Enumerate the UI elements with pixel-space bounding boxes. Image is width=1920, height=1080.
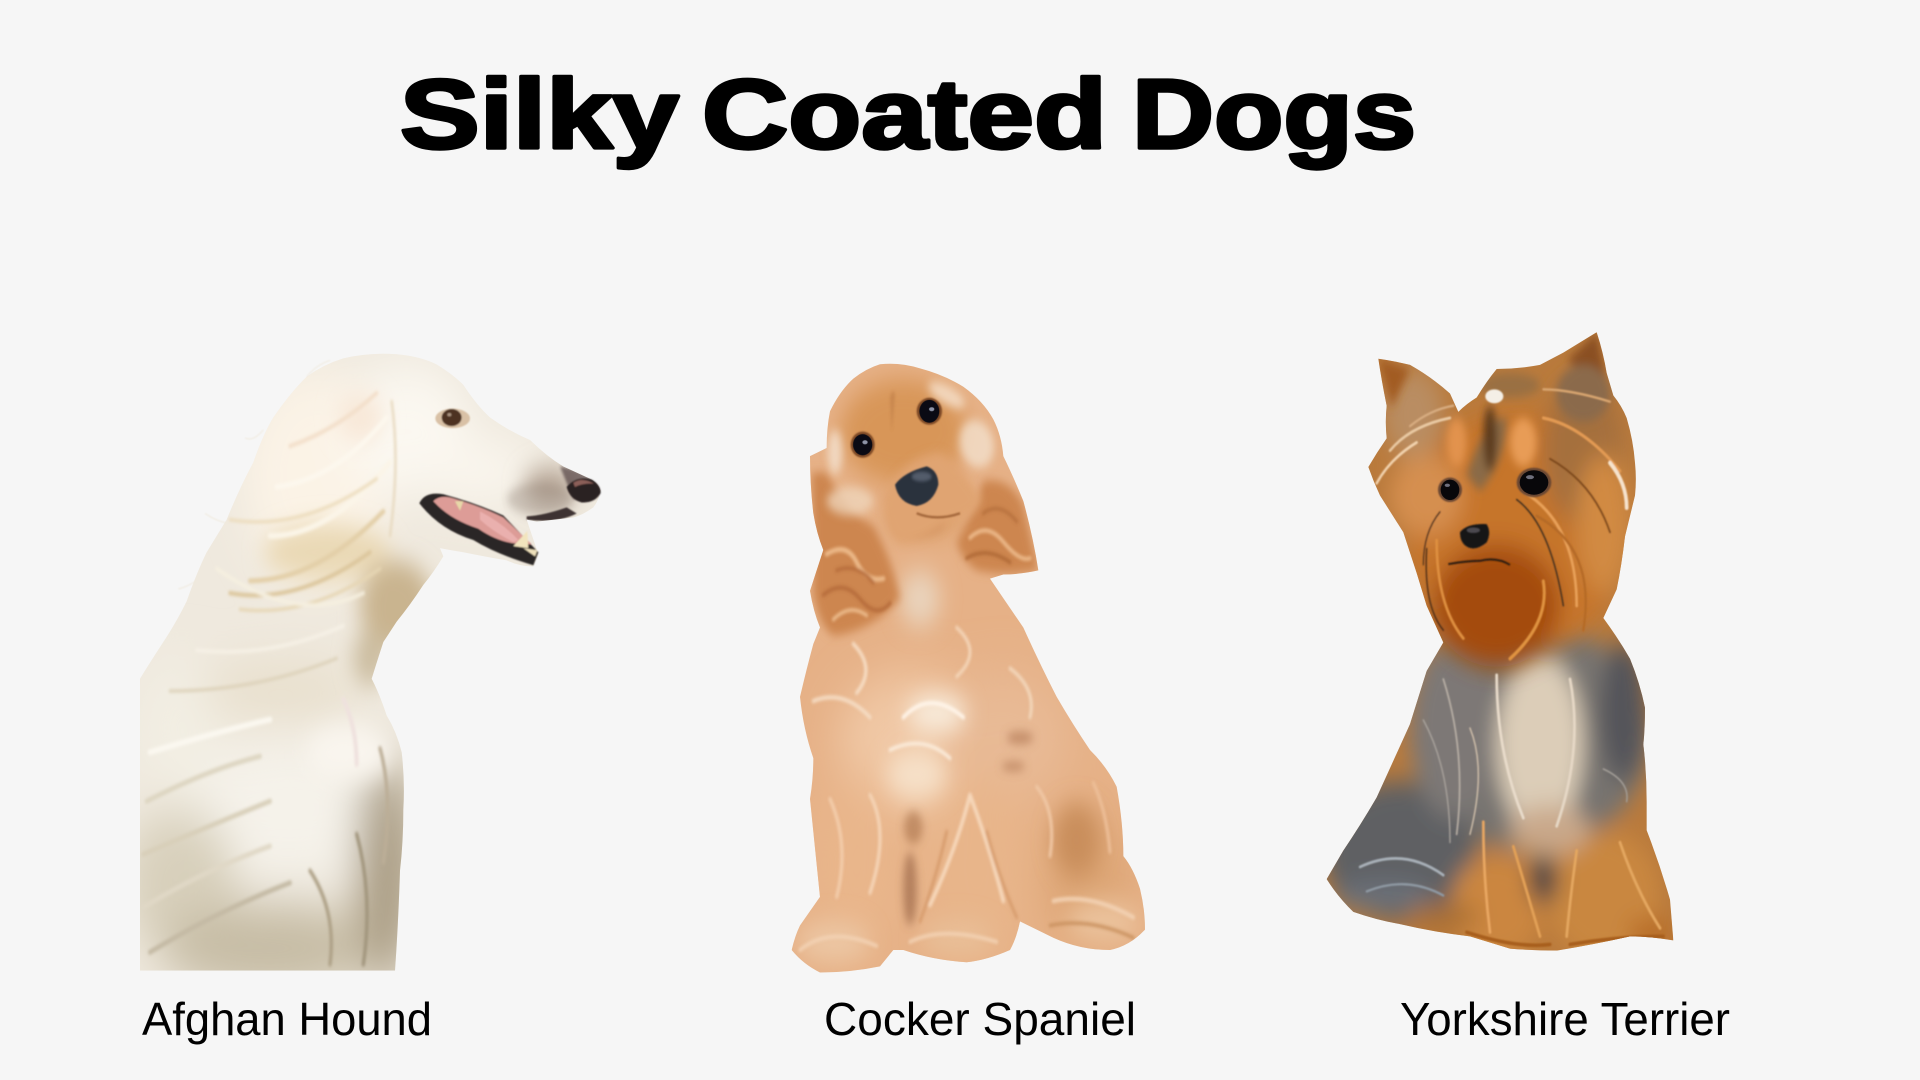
title: Dogs <box>1132 59 1416 169</box>
nose <box>567 479 601 503</box>
illustration: Yorkshire Terrier <box>1326 332 1674 951</box>
face: muzzle, eyes, nose <box>851 391 982 544</box>
nose and mouth <box>1448 524 1510 565</box>
label: Cocker Spaniel: Cocker Spaniel <box>824 993 1136 1045</box>
fur strands <box>1360 389 1663 945</box>
eye <box>435 409 470 428</box>
title <box>400 59 1416 169</box>
title: Coated <box>702 59 1107 169</box>
label: Afghan Hound: Afghan Hound <box>142 993 432 1045</box>
muzzle shading <box>507 483 573 516</box>
wispy hair <box>178 360 330 589</box>
illustration: Cocker Spaniel <box>792 364 1145 972</box>
label: Yorkshire Terrier: Yorkshire Terrier <box>1400 993 1730 1045</box>
hair tie <box>1485 389 1503 403</box>
title: Silky <box>400 59 679 169</box>
mouth <box>419 494 538 565</box>
fur strands <box>143 393 395 964</box>
eyes <box>1438 468 1551 502</box>
body <box>1460 626 1646 862</box>
head <box>1407 410 1627 655</box>
illustration: Afghan Hound <box>140 354 602 970</box>
curly fur strands <box>800 509 1133 950</box>
ears <box>812 472 900 636</box>
